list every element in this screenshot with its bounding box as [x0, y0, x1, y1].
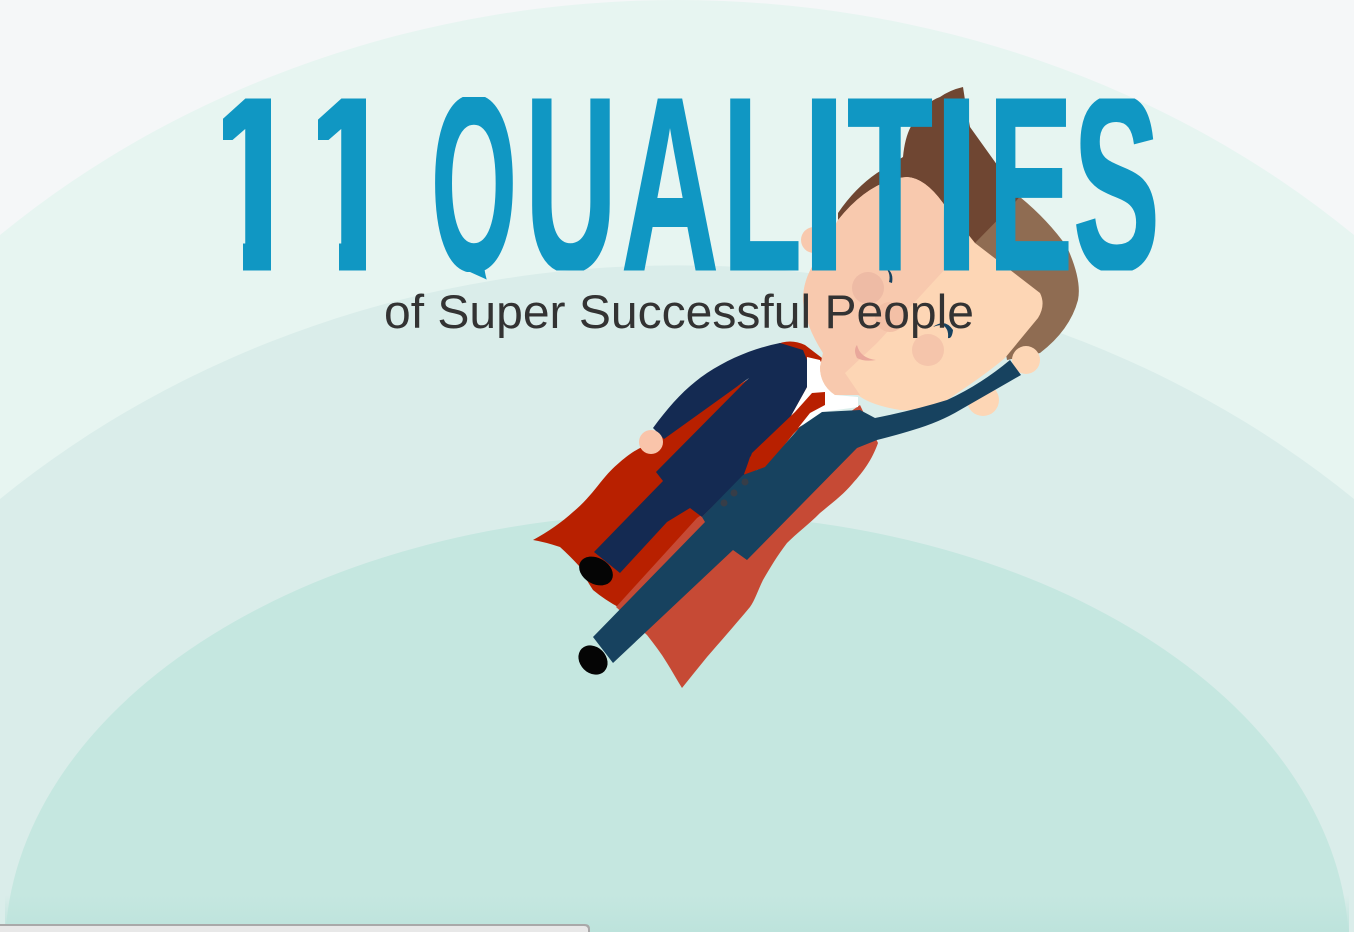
front suit with raised arm — [593, 360, 1021, 663]
illustration: flying businessman with cape — [533, 87, 1079, 688]
subtitle: of Super Successful People — [384, 285, 974, 338]
title: L — [722, 44, 802, 323]
shoe: front — [572, 639, 614, 681]
eye: left — [886, 268, 892, 283]
title: 1 — [300, 44, 400, 323]
hand: right — [1012, 346, 1040, 374]
back cape — [533, 342, 828, 608]
face: shaded left half — [803, 177, 947, 395]
title: S — [1073, 44, 1160, 323]
browser scrollbar strip — [0, 924, 590, 932]
shirt collar — [787, 357, 858, 428]
shoe: back — [574, 551, 618, 591]
cheek: right — [912, 334, 944, 366]
eye: right — [933, 323, 953, 338]
nose — [875, 302, 905, 332]
ear: top — [801, 227, 827, 253]
front cape — [616, 405, 878, 688]
title — [223, 97, 1156, 280]
title: 1 — [204, 44, 304, 323]
title: A — [621, 44, 719, 323]
back arm and leg — [594, 343, 807, 573]
face — [803, 177, 1043, 410]
necktie — [744, 392, 825, 474]
hair: dark front — [838, 87, 1020, 243]
title: U — [525, 44, 617, 323]
bottom shading — [5, 895, 1349, 932]
title: I — [802, 44, 846, 323]
background dome: inner — [6, 513, 1348, 932]
hand: left — [639, 430, 663, 454]
mouth — [855, 345, 876, 361]
title: Q — [431, 44, 517, 323]
background dome: middle — [0, 265, 1354, 932]
title: T — [847, 44, 933, 323]
jacket buttons — [720, 478, 748, 506]
title: I — [934, 44, 980, 323]
cheek: left — [852, 272, 884, 304]
ear: bottom — [967, 384, 999, 416]
title: E — [988, 44, 1073, 323]
hair: lighter back — [973, 197, 1079, 360]
